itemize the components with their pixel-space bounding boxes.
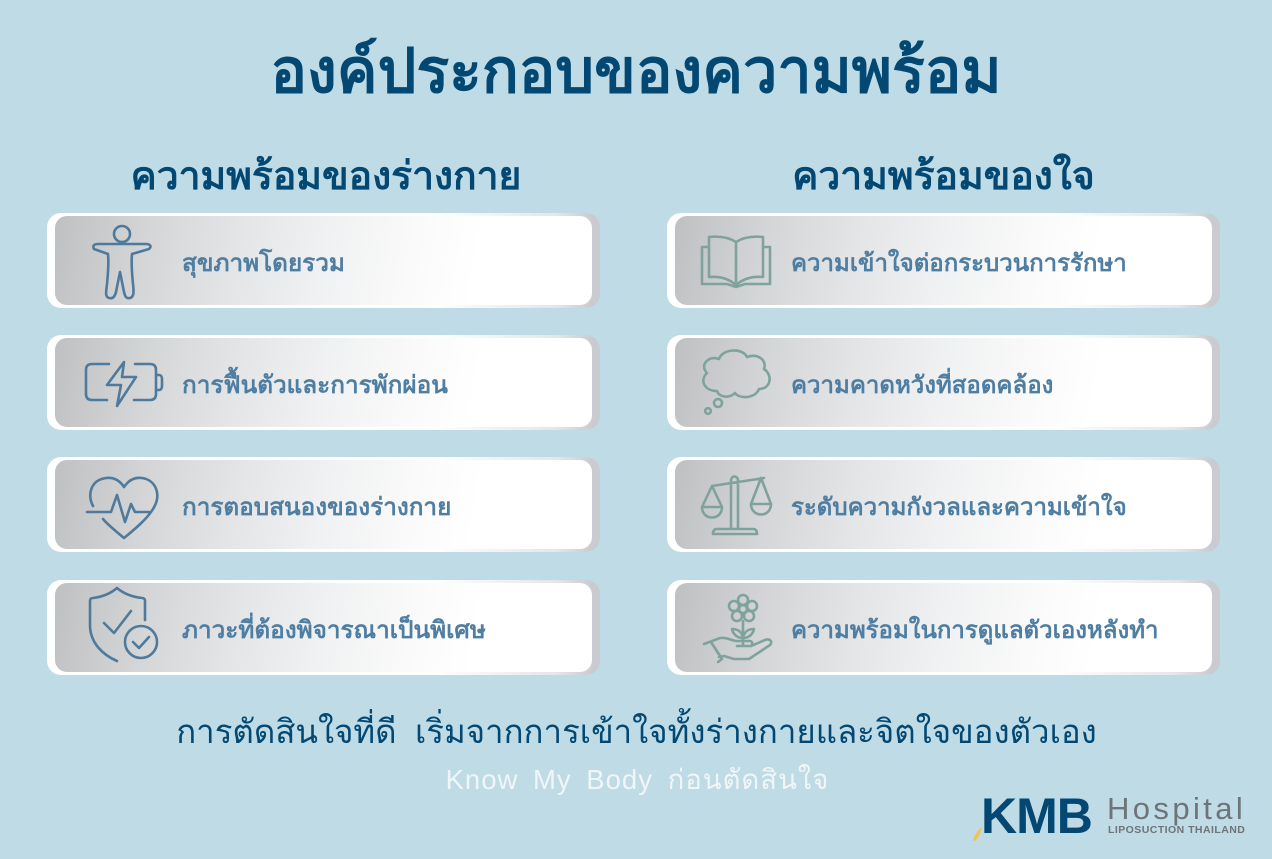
label: ความเข้าใจต่อกระบวนการรักษา (791, 250, 1127, 277)
label: ความพร้อมในการดูแลตัวเองหลังทำ (791, 617, 1158, 644)
logo wordmark: KMB (981, 788, 1092, 844)
panel: recovery and rest (47, 335, 600, 430)
icon: battery with bolt (84, 360, 164, 408)
label: การตอบสนองของร่างกาย (182, 494, 451, 521)
heading: mental readiness: ความพร้อมของใจ (792, 155, 1095, 198)
panel: understanding of process (667, 213, 1220, 308)
panel: aftercare readiness (667, 580, 1220, 675)
panel: anxiety level (667, 457, 1220, 552)
logo mark: yellow accent (973, 827, 982, 841)
icon: hand holding flower (702, 594, 772, 664)
icon: thought bubble (702, 349, 771, 416)
icon: balance scales (700, 475, 772, 536)
panel: aligned expectations (667, 335, 1220, 430)
panel: special considerations (47, 580, 600, 675)
icon: shield with check (88, 586, 158, 662)
icon: person (92, 224, 152, 300)
closing statement: การตัดสินใจที่ดี เริ่มจากการเข้าใจทั้งร่างกายและจิตใจของตัวเอง (176, 713, 1097, 750)
label: ระดับความกังวลและความเข้าใจ (791, 494, 1127, 521)
label: สุขภาพโดยรวม (182, 250, 345, 277)
panel: overall health (47, 213, 600, 308)
tagline: Know My Body ก่อนตัดสินใจ (446, 764, 829, 795)
icon: open book (700, 235, 772, 288)
logo name: Hospital (1107, 791, 1246, 826)
icon: heart with pulse (86, 476, 159, 540)
heading: physical readiness: ความพร้อมของร่างกาย (131, 155, 521, 198)
title: องค์ประกอบของความพร้อม (270, 37, 1002, 105)
logo: KMB Hospital (973, 788, 1246, 844)
logo subtitle: LIPOSUCTION THAILAND (1108, 824, 1245, 836)
panel: body response (47, 457, 600, 552)
label: ความคาดหวังที่สอดคล้อง (791, 372, 1053, 399)
label: ภาวะที่ต้องพิจารณาเป็นพิเศษ (182, 617, 486, 644)
label: การฟื้นตัวและการพักผ่อน (182, 372, 448, 399)
